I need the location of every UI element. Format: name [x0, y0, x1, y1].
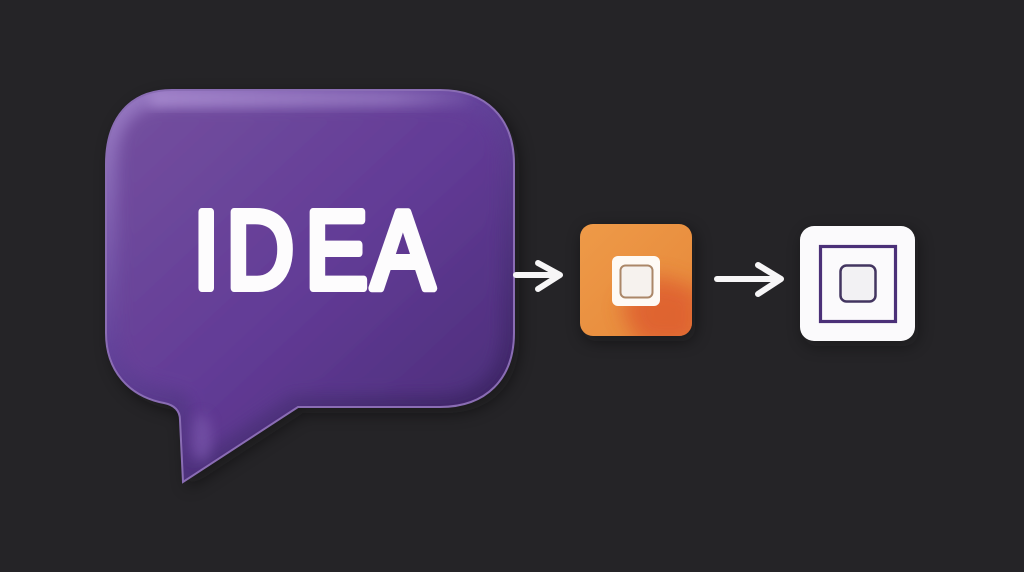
diagram: idea to product flow — [105, 89, 915, 484]
icon: white tile with nested squares — [800, 226, 918, 346]
speech bubble: IDEA — [106, 90, 519, 488]
bubble label: IDEA — [193, 189, 434, 312]
icon: orange tile with square — [580, 224, 700, 345]
arrow: orange tile to white tile — [717, 265, 781, 294]
arrow: bubble to orange tile — [516, 263, 560, 289]
